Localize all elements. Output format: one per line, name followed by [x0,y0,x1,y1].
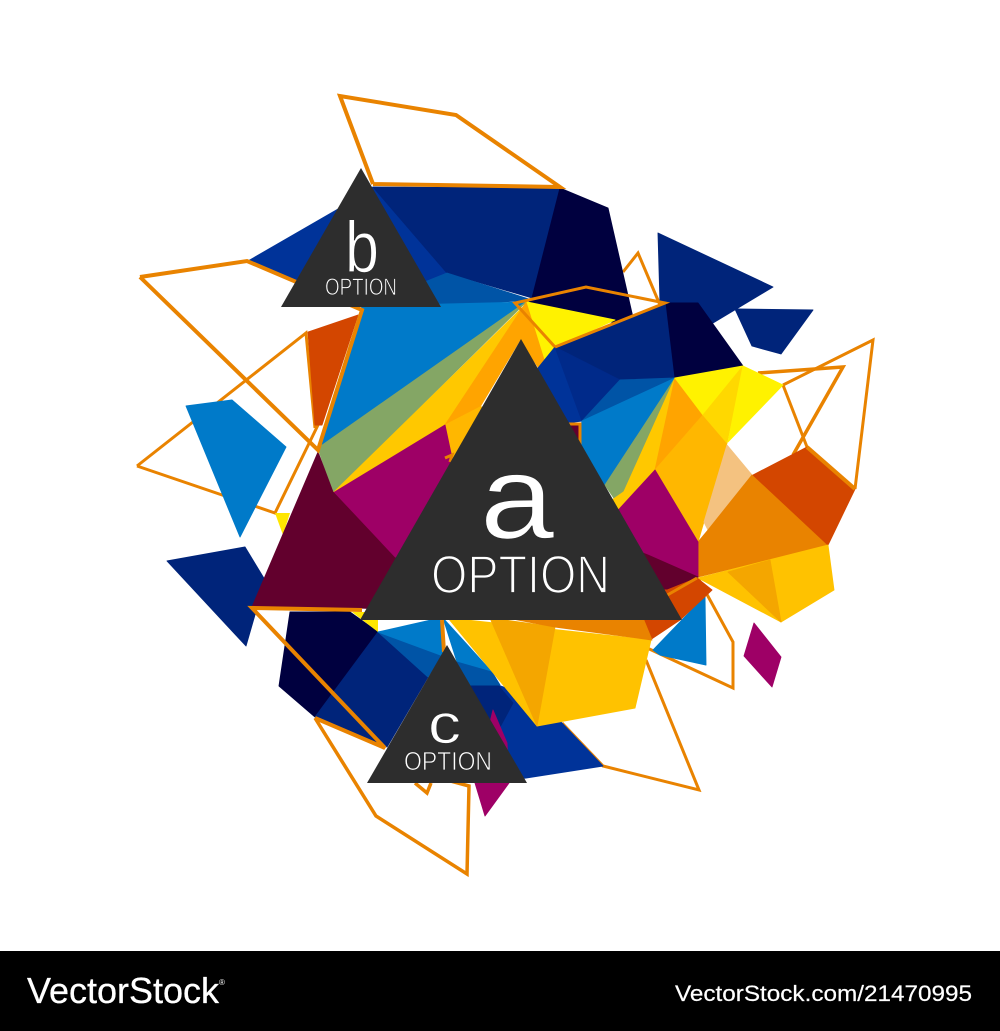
triangle c: option c [367,645,527,783]
label: option a: OPTION [431,545,610,605]
shards: left loose pieces [167,315,358,646]
footer bar [0,951,1000,1031]
letter b: b [345,208,379,288]
shards: right blue cluster [538,233,813,513]
shards: top blue cluster [248,187,634,322]
triangle a: option a [360,339,682,620]
registered mark: ® [219,978,225,987]
shards: lower cluster [279,612,652,816]
label: option b: OPTION [325,274,397,301]
label: option c: OPTION [404,746,492,776]
outlines behind the shards [137,253,873,874]
letter c: c [428,692,461,755]
letter a: a [480,432,554,564]
shards: right warm cluster [600,366,855,687]
triangle b: option b [281,168,441,307]
footer logo text: VectorStock [27,970,220,1011]
shards: upper centre fan [252,301,615,610]
small outlined fragment left of triangle a [445,455,452,462]
outlines in front of the shards [140,96,855,748]
footer image id: VectorStock.com/21470995 [675,981,972,1006]
small fragment right of triangle a [555,423,580,482]
